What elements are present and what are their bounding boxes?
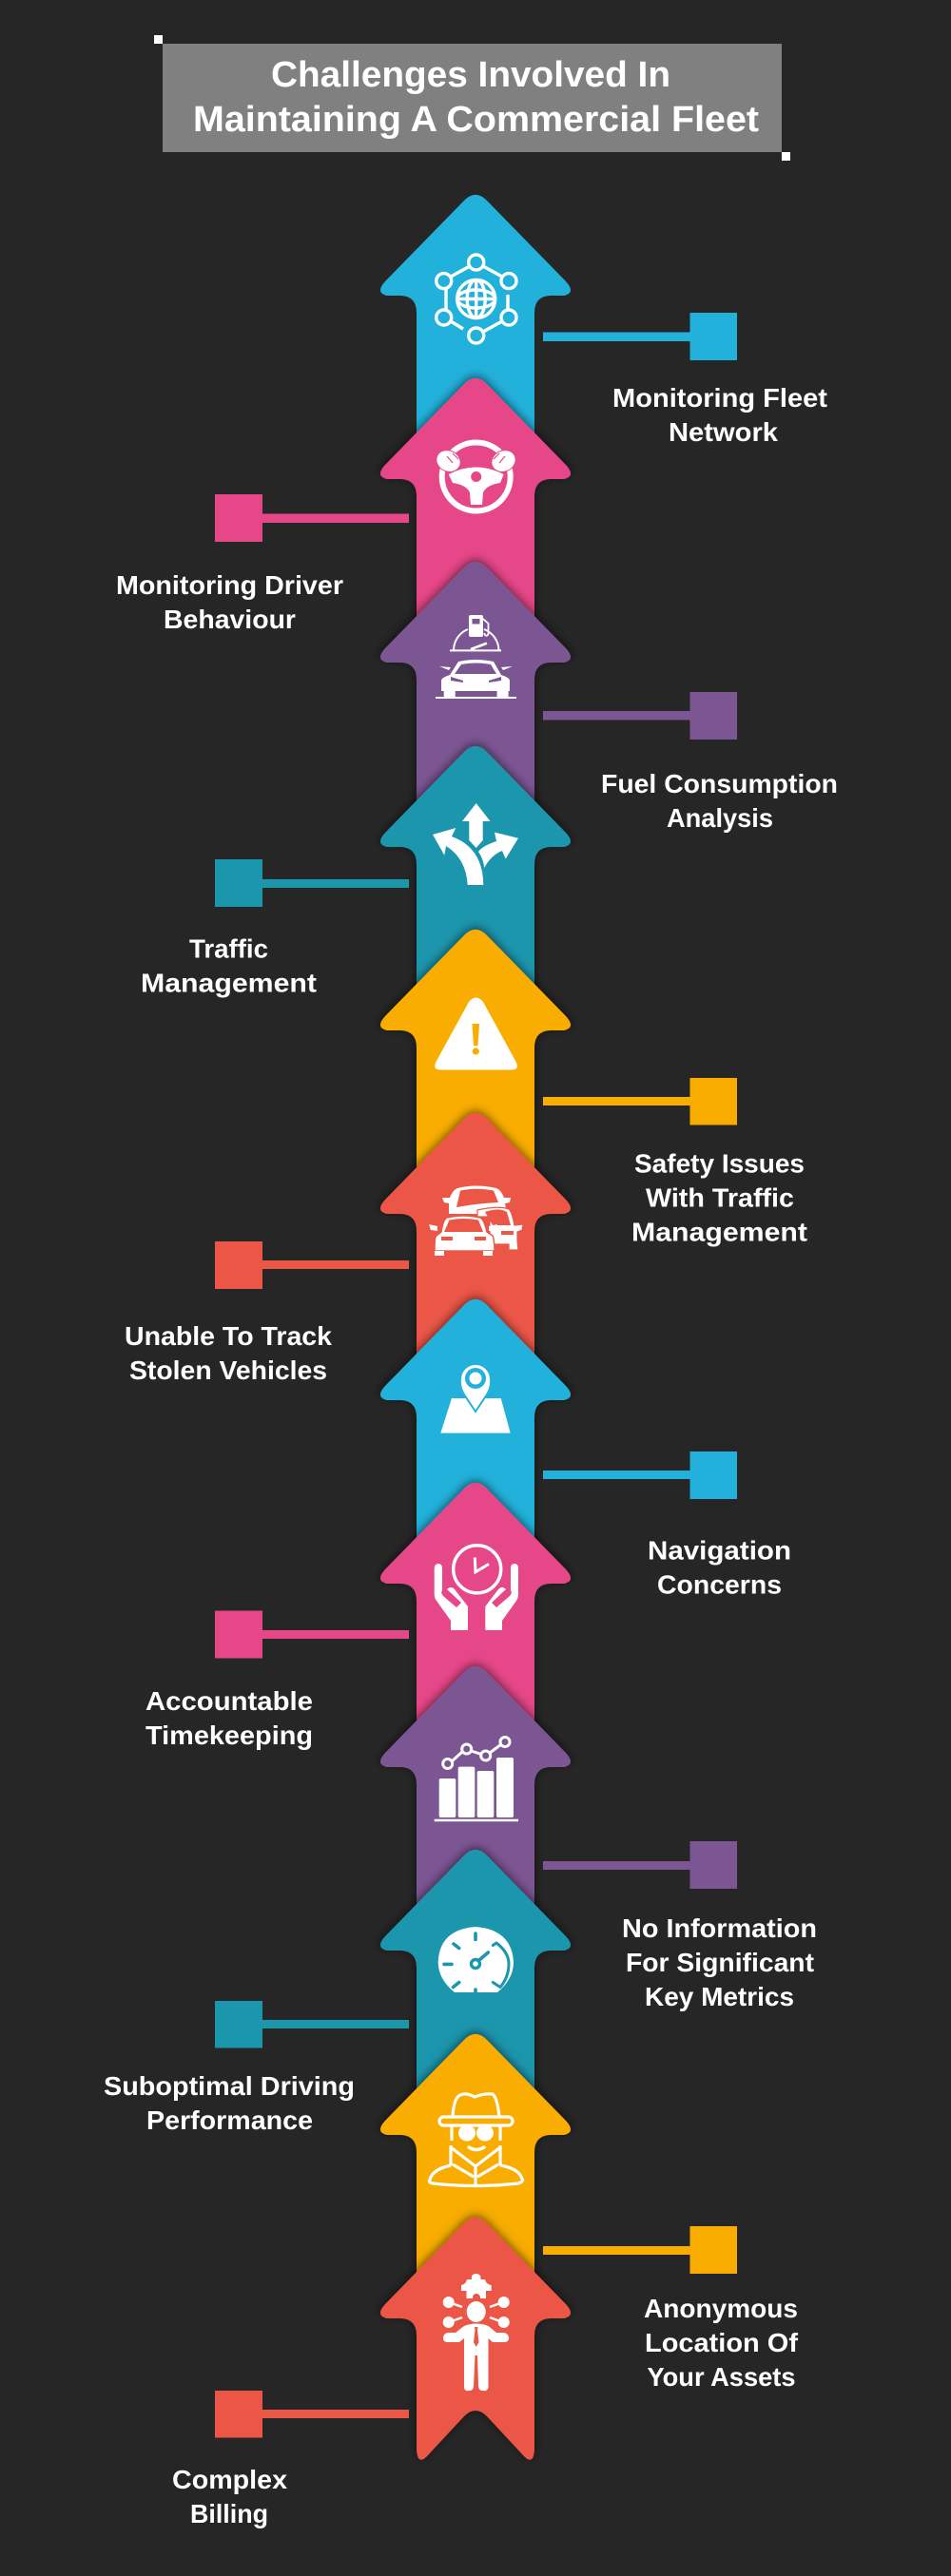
connector 7 <box>543 1451 737 1499</box>
icon: map pin <box>440 1364 511 1433</box>
label: anonymous location of your assets: Your Assets <box>647 2362 795 2392</box>
icon: three cars <box>429 1186 523 1256</box>
connector 6 <box>215 1241 409 1289</box>
arrow 3: fuel consumption analysis <box>380 562 571 817</box>
arrow 10: suboptimal driving performance <box>380 1850 571 2105</box>
label: monitoring driver behaviour: Monitoring Driver <box>116 570 343 600</box>
label: monitoring fleet network <box>612 383 827 447</box>
arrow 1: monitoring fleet network <box>380 195 571 451</box>
title: Challenges Involved In <box>271 55 670 95</box>
label: suboptimal driving performance <box>104 2071 355 2135</box>
connector 5 <box>543 1078 737 1125</box>
icon: speedometer <box>438 1927 514 1992</box>
label: traffic management <box>141 933 317 998</box>
label: unable to track stolen vehicles: Unable To Track <box>125 1321 332 1351</box>
label: fuel consumption analysis: Fuel Consumption <box>601 769 838 798</box>
label: fuel consumption analysis <box>601 769 838 833</box>
label: monitoring driver behaviour: Behaviour <box>164 605 296 634</box>
label: monitoring fleet network: Monitoring Fleet <box>612 383 827 413</box>
label: navigation concerns: Concerns <box>657 1570 782 1599</box>
arrow 8: accountable timekeeping <box>380 1483 571 1739</box>
label: navigation concerns: Navigation <box>648 1536 791 1565</box>
connector 12 <box>215 2391 409 2437</box>
label: suboptimal driving performance: Performance <box>146 2105 313 2135</box>
label: accountable timekeeping: Accountable <box>146 1686 313 1716</box>
label: anonymous location of your assets <box>644 2294 799 2392</box>
label: safety issues with traffic management <box>631 1148 807 1247</box>
label: anonymous location of your assets: Anonymous <box>644 2294 798 2323</box>
label: safety issues with traffic management: Safety Issues <box>634 1148 805 1179</box>
icon: steering wheel <box>433 443 519 511</box>
label: unable to track stolen vehicles <box>125 1321 332 1385</box>
title: Maintaining A Commercial Fleet <box>193 100 759 140</box>
connector 3 <box>543 692 737 740</box>
label: accountable timekeeping: Timekeeping <box>146 1721 313 1750</box>
connector 8 <box>215 1610 409 1658</box>
label: no information for significant key metrics: Key Metrics <box>645 1982 794 2011</box>
label: anonymous location of your assets: Location Of <box>645 2328 799 2357</box>
label: no information for significant key metrics <box>622 1913 817 2011</box>
connector 10 <box>215 2001 409 2047</box>
icon: warning triangle <box>435 998 517 1070</box>
arrow 2: monitoring driver behaviour <box>380 378 571 634</box>
connector 4 <box>215 859 409 907</box>
arrow 12: complex billing <box>380 2218 571 2460</box>
arrow 4: traffic management <box>380 746 571 1002</box>
label: complex billing <box>172 2465 287 2528</box>
label: complex billing: Complex <box>172 2465 287 2494</box>
label: navigation concerns <box>648 1536 791 1599</box>
icon: bar chart with trend line <box>435 1738 518 1820</box>
label: monitoring fleet network: Network <box>669 417 778 447</box>
connector 2 <box>215 494 409 542</box>
icon: confused person with puzzle piece <box>443 2274 510 2391</box>
label: traffic management: Traffic <box>189 933 268 964</box>
arrow 5: safety issues with traffic management <box>380 930 571 1185</box>
label: no information for significant key metrics: No Information <box>622 1913 817 1943</box>
label: monitoring driver behaviour <box>116 570 343 634</box>
connector 11 <box>543 2226 737 2274</box>
title <box>154 35 790 161</box>
connector 1 <box>543 313 737 360</box>
connector 9 <box>543 1841 737 1889</box>
icon: network globe <box>437 255 516 343</box>
label: complex billing: Billing <box>190 2499 268 2528</box>
label: accountable timekeeping <box>146 1686 313 1750</box>
arrow 7: navigation concerns <box>380 1299 571 1555</box>
icon: three-way arrows <box>433 803 518 885</box>
icon: spy with hat <box>429 2094 523 2186</box>
label: suboptimal driving performance: Suboptimal Driving <box>104 2071 355 2101</box>
label: traffic management: Management <box>141 968 317 998</box>
arrow 11: anonymous location of your assets <box>380 2034 571 2290</box>
arrow 9: no information for significant key metrics <box>380 1666 571 1922</box>
label: safety issues with traffic management: With Traffic <box>646 1182 794 1213</box>
label: no information for significant key metrics: For Significant <box>626 1948 814 1977</box>
label: fuel consumption analysis: Analysis <box>667 803 773 833</box>
arrow 6: unable to track stolen vehicles <box>380 1113 571 1369</box>
icon: hands holding clock <box>435 1546 518 1630</box>
icon: fuel pump and car <box>436 615 516 698</box>
label: unable to track stolen vehicles: Stolen Vehicles <box>129 1355 327 1385</box>
label: safety issues with traffic management: Management <box>631 1217 807 1247</box>
